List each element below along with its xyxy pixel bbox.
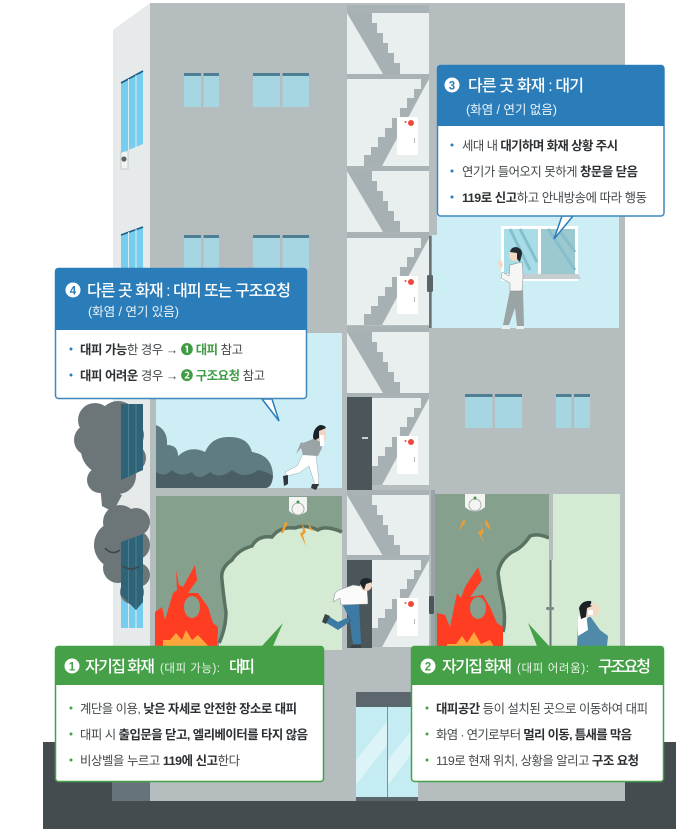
running woman <box>283 425 326 490</box>
callout 3: fire elsewhere, wait <box>437 65 664 239</box>
side windows <box>121 71 143 628</box>
callout 3: fire elsewhere, wait: 다른 곳 화재 : 대기 <box>468 77 584 95</box>
callout 4: fire elsewhere, escape or rescue: 대피 어려운 경우 → ❷ 구조요청 참고 <box>80 368 265 383</box>
callout 1: own home fire, escape: 자기집 화재 <box>85 658 155 676</box>
man covering mouth <box>322 578 372 648</box>
callout 2: own home fire, rescue: 119로 현재 위치, 상황을 알리고 구조 요청 <box>436 753 639 768</box>
room 3: waiting <box>427 200 619 329</box>
alarm sparks <box>281 522 316 546</box>
callout 3: fire elsewhere, wait: 세대 내 대기하며 화재 상황 주시 <box>462 138 618 153</box>
ground base <box>43 742 676 829</box>
callout 4: fire elsewhere, escape or rescue: 4 <box>70 286 77 298</box>
callout 3: fire elsewhere, wait: 연기가 들어오지 못하게 창문을 닫음 <box>462 164 638 179</box>
exterior smoke <box>74 401 150 610</box>
window <box>501 226 581 281</box>
callout 4: fire elsewhere, escape or rescue: (화염 / 연기 있음) <box>88 305 179 319</box>
air conditioner unit <box>121 151 128 169</box>
smoke layer <box>155 496 342 650</box>
fire <box>437 567 503 650</box>
callout 2: own home fire, rescue: 자기집 화재 <box>442 658 512 676</box>
callout 3: fire elsewhere, wait: 119로 신고하고 안내방송에 따라 행동 <box>462 190 647 205</box>
stair door lower <box>347 560 372 648</box>
building front wall <box>150 3 625 801</box>
callout 1: own home fire, escape: 대피 시 출입문을 닫고, 엘리베이터를 타지 않음 <box>80 728 308 742</box>
callout 1: own home fire, escape: (대피 가능): <box>160 662 220 675</box>
room 4: smoke elsewhere <box>156 333 347 490</box>
crouching woman <box>577 601 608 646</box>
indoor smoke <box>156 425 273 488</box>
callout 2: own home fire, rescue: 구조요청 <box>598 658 651 676</box>
man with phone <box>498 247 524 329</box>
callout 2: own home fire, rescue: (대피 어려움): <box>517 662 589 675</box>
callout 1: own home fire, escape: 1 <box>69 662 76 674</box>
entrance door <box>356 692 418 801</box>
stairwell <box>347 5 429 648</box>
front windows <box>184 73 590 428</box>
callout 1: own home fire, escape <box>55 623 324 782</box>
room 1: own home fire, escape <box>150 490 372 650</box>
callout 2: own home fire, rescue <box>411 623 664 782</box>
alarm sparks <box>459 519 491 545</box>
smoke detector <box>289 497 307 515</box>
callout 3: fire elsewhere, wait: 3 <box>449 80 455 92</box>
building side wall <box>112 3 150 801</box>
callout 1: own home fire, escape: 계단을 이용, 낮은 자세로 안전한 장소로 대피 <box>80 701 297 716</box>
fire <box>155 565 218 650</box>
callout 4: fire elsewhere, escape or rescue <box>55 268 307 421</box>
callout 3: fire elsewhere, wait: (화염 / 연기 없음) <box>466 103 557 117</box>
callout 4: fire elsewhere, escape or rescue: 대피 가능한 경우 → ❶ 대피 참고 <box>80 342 243 357</box>
callout 4: fire elsewhere, escape or rescue: 다른 곳 화재 : 대피 또는 구조요청 <box>87 282 291 300</box>
callout 2: own home fire, rescue: 2 <box>425 662 431 674</box>
callout 1: own home fire, escape: 대피 <box>229 658 255 676</box>
stair door upper <box>347 397 372 490</box>
smoke detector <box>465 494 485 512</box>
callout 2: own home fire, rescue: 화염 · 연기로부터 멀리 이동, 틈새를 막음 <box>436 728 632 742</box>
room 2: own home fire, rescue <box>429 490 620 650</box>
callout 1: own home fire, escape: 비상벨을 누르고 119에 신고한다 <box>80 754 241 768</box>
callout 2: own home fire, rescue: 대피공간 등이 설치된 곳으로 이동하여 대피 <box>436 702 648 716</box>
